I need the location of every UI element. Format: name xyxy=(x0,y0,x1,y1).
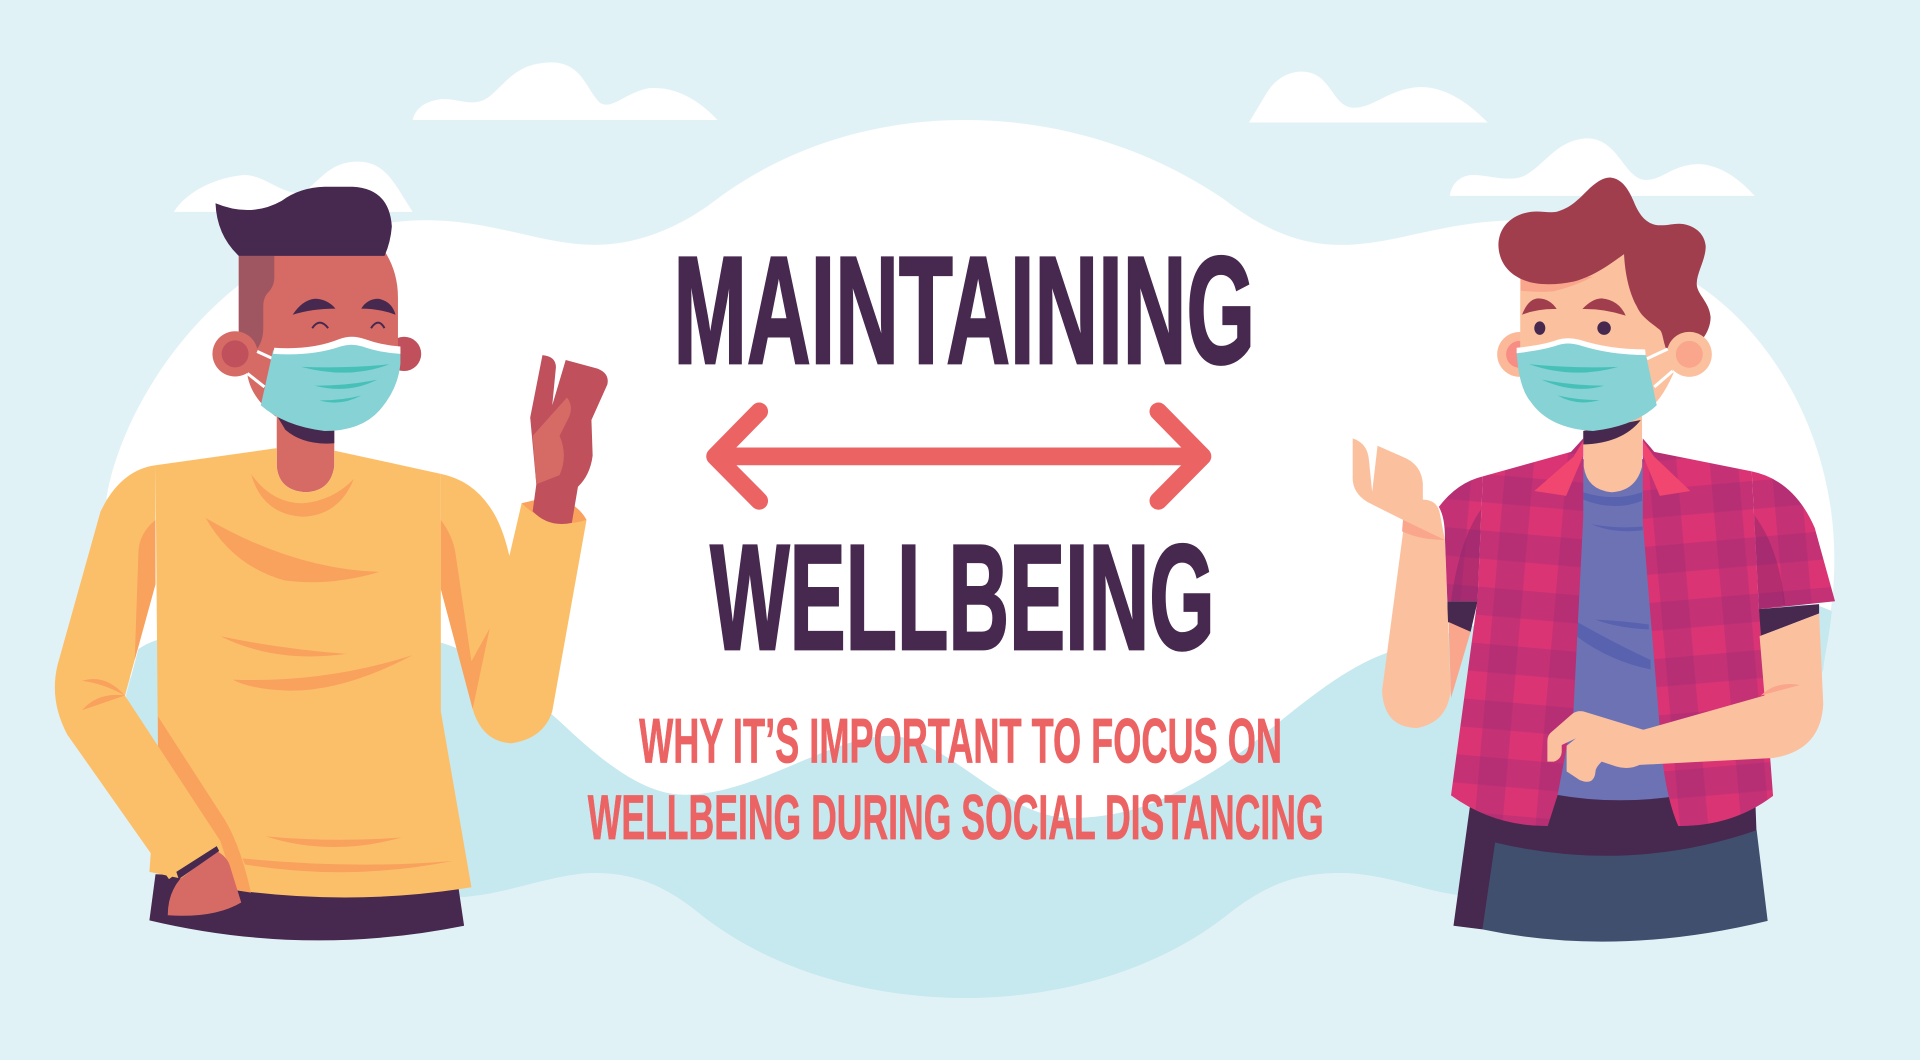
cloud: top centre right xyxy=(1249,72,1488,122)
hand in pocket xyxy=(168,851,241,916)
left arm shadow xyxy=(135,520,156,660)
cloud: right xyxy=(1450,138,1755,196)
head xyxy=(1520,245,1673,422)
closed eyes xyxy=(312,323,384,328)
sweater torso xyxy=(149,448,471,897)
eyebrows xyxy=(1522,298,1626,316)
right ear xyxy=(1667,332,1712,377)
cloud: behind left man xyxy=(174,162,413,212)
elbow wrinkles xyxy=(82,679,125,710)
title: Maintaining: MAINTAINING xyxy=(673,225,1255,396)
hair xyxy=(216,187,392,256)
sleeve opening xyxy=(522,497,587,523)
inner sleeve: right xyxy=(1759,604,1819,636)
sweater wrinkles xyxy=(158,474,453,893)
ear loops xyxy=(1647,349,1673,387)
character: right man in plaid shirt xyxy=(1353,178,1835,942)
mask folds xyxy=(301,364,389,403)
ear loops xyxy=(247,351,273,387)
eyes xyxy=(1534,321,1545,335)
inner arm shadow xyxy=(1449,622,1471,698)
forehead shadow xyxy=(1521,277,1593,292)
forearm and pointing hand xyxy=(1547,613,1823,782)
sideburn shade xyxy=(239,256,274,355)
mask folds xyxy=(1529,364,1618,402)
hand highlight xyxy=(533,397,571,484)
ears xyxy=(387,337,421,371)
t-shirt xyxy=(1556,459,1669,800)
neck shadow xyxy=(278,418,334,444)
t-shirt folds xyxy=(1577,492,1651,669)
subtitle line 2: WELLBEING DURING SOCIAL DISTANCING xyxy=(588,783,1324,853)
left ear xyxy=(212,331,258,377)
mask top band xyxy=(1517,338,1646,355)
left arm xyxy=(55,465,220,879)
shirt: right sleeve xyxy=(1752,471,1835,609)
sleeve shadow left xyxy=(1451,509,1481,601)
shirt: right panel xyxy=(1643,438,1773,826)
left ear xyxy=(1497,332,1542,377)
raised arm shadow xyxy=(441,520,490,709)
raised arm xyxy=(441,474,587,743)
forearm wrinkle xyxy=(1761,684,1800,696)
mask xyxy=(261,339,400,431)
white background blob xyxy=(107,120,1834,857)
collar right xyxy=(1643,441,1690,496)
trousers waistband xyxy=(1453,784,1758,929)
light blue lower wave xyxy=(126,588,1832,998)
title: Wellbeing: WELLBEING xyxy=(710,513,1215,681)
mask top band xyxy=(273,337,400,354)
raised arm xyxy=(1353,438,1451,728)
trousers xyxy=(149,874,464,940)
icon: double-headed arrow xyxy=(715,411,1202,501)
eyebrows xyxy=(293,299,396,315)
character: left man in yellow sweater xyxy=(55,187,608,940)
neck shadow xyxy=(1583,420,1641,444)
neck xyxy=(1584,416,1642,492)
trousers xyxy=(1482,830,1768,942)
mask xyxy=(1517,340,1657,431)
collar left xyxy=(1534,441,1583,496)
shirt: left panel xyxy=(1451,438,1583,826)
raised hand holding phone xyxy=(530,355,608,524)
hair xyxy=(1498,178,1711,350)
inner sleeve: left xyxy=(1447,601,1478,632)
wrist shadow xyxy=(1402,520,1445,540)
cloud: top left xyxy=(413,62,718,120)
neck xyxy=(277,410,334,492)
head xyxy=(239,251,398,416)
shirt: left sleeve xyxy=(1439,476,1483,601)
sleeve cuff xyxy=(176,846,219,879)
sleeve shadow right xyxy=(1753,514,1785,609)
subtitle line 1: WHY IT’S IMPORTANT TO FOCUS ON xyxy=(639,706,1282,776)
